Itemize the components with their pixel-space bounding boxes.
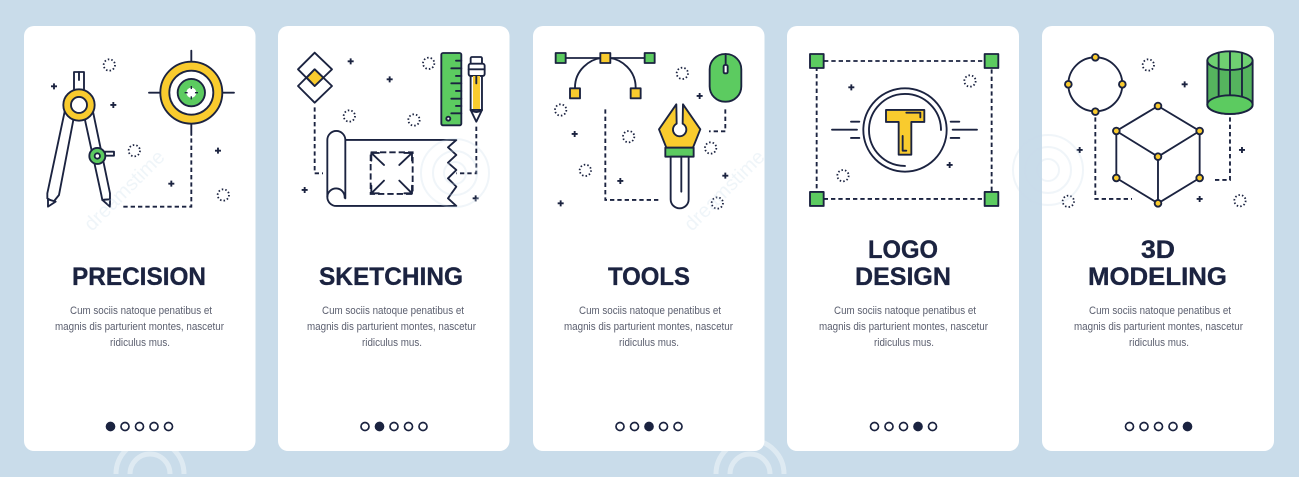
title <box>1088 236 1227 291</box>
icon: circle with nodes <box>1065 54 1126 115</box>
text block: magnis dis parturient montes, nascetur <box>819 321 988 333</box>
decorative plus and dotted marks <box>51 59 229 201</box>
text block: magnis dis parturient montes, nascetur <box>564 321 733 333</box>
pagination dots <box>361 422 427 430</box>
icon: wireframe cylinder <box>1207 51 1253 114</box>
panel: sketching <box>278 26 510 451</box>
icon: blueprint scroll <box>327 131 456 206</box>
illustration: logo in bounding box <box>810 54 998 206</box>
text block: magnis dis parturient montes, nascetur <box>55 321 224 333</box>
watermark: dreamstime <box>680 146 769 236</box>
text block: Cum sociis natoque penatibus et <box>834 305 976 317</box>
text block: magnis dis parturient montes, nascetur <box>1074 321 1243 333</box>
watermark: dreamstime <box>80 146 169 236</box>
title: LOGO <box>868 236 938 264</box>
connector: dashed line right <box>1212 117 1230 180</box>
text block <box>55 305 224 349</box>
illustration: wireframe shapes <box>1063 51 1253 207</box>
text block: magnis dis parturient montes, nascetur <box>307 321 476 333</box>
icon: mouse <box>710 54 741 102</box>
text block: ridiculus mus. <box>362 337 422 349</box>
title: DESIGN <box>855 263 951 291</box>
watermark <box>80 135 1083 474</box>
decorative plus and dotted marks <box>1063 59 1246 207</box>
icon: T logo badge <box>863 88 947 172</box>
icon: ruler <box>441 53 461 125</box>
title: TOOLS <box>608 263 690 291</box>
icon: layered diamonds <box>298 53 332 103</box>
text block: ridiculus mus. <box>1129 337 1189 349</box>
icon: pencil <box>469 57 485 122</box>
text block: Cum sociis natoque penatibus et <box>70 305 212 317</box>
text block: ridiculus mus. <box>874 337 934 349</box>
pagination dots <box>870 422 936 430</box>
decorative plus and dotted marks <box>837 75 976 181</box>
connector: dashed line left <box>1095 117 1132 199</box>
pagination dots <box>616 422 682 430</box>
text block <box>819 305 988 349</box>
text block <box>307 305 476 349</box>
panel: logo design <box>787 26 1019 451</box>
connector: dashed line left <box>315 107 323 173</box>
text block <box>564 305 733 349</box>
decorative plus and dotted marks <box>302 58 479 201</box>
text block: ridiculus mus. <box>619 337 679 349</box>
panel: precision <box>24 26 256 451</box>
text block: Cum sociis natoque penatibus et <box>322 305 464 317</box>
decorative plus and dotted marks <box>555 68 728 209</box>
text block <box>1074 305 1243 349</box>
panel: tools <box>533 26 764 451</box>
title <box>855 236 951 291</box>
icon: drawing compass <box>47 72 114 207</box>
pagination dots <box>106 422 172 430</box>
title: MODELING <box>1088 263 1227 291</box>
illustration: compass and target <box>47 51 234 207</box>
pagination dots <box>1126 422 1192 430</box>
title: SKETCHING <box>319 263 463 291</box>
panel: 3D modeling <box>1042 26 1274 451</box>
connector: dashed line to pen <box>605 109 660 200</box>
connector: dashed line to mouse <box>709 109 725 131</box>
bounding box with handles <box>810 54 998 206</box>
text block: Cum sociis natoque penatibus et <box>1089 305 1231 317</box>
icon: bezier curve <box>556 53 655 98</box>
icon: target <box>149 51 234 135</box>
text block: ridiculus mus. <box>110 337 170 349</box>
illustration: blueprint, ruler and pencil <box>298 53 485 206</box>
title: 3D <box>1141 236 1175 264</box>
text block: Cum sociis natoque penatibus et <box>579 305 721 317</box>
illustration: bezier curve, mouse and pen <box>555 53 741 209</box>
speed lines <box>832 122 977 138</box>
title: PRECISION <box>72 263 206 291</box>
icon: wireframe cube <box>1113 103 1203 207</box>
connector: dashed line right <box>456 127 476 173</box>
icon: pen nib <box>659 104 700 208</box>
connector: dashed line <box>121 138 191 207</box>
